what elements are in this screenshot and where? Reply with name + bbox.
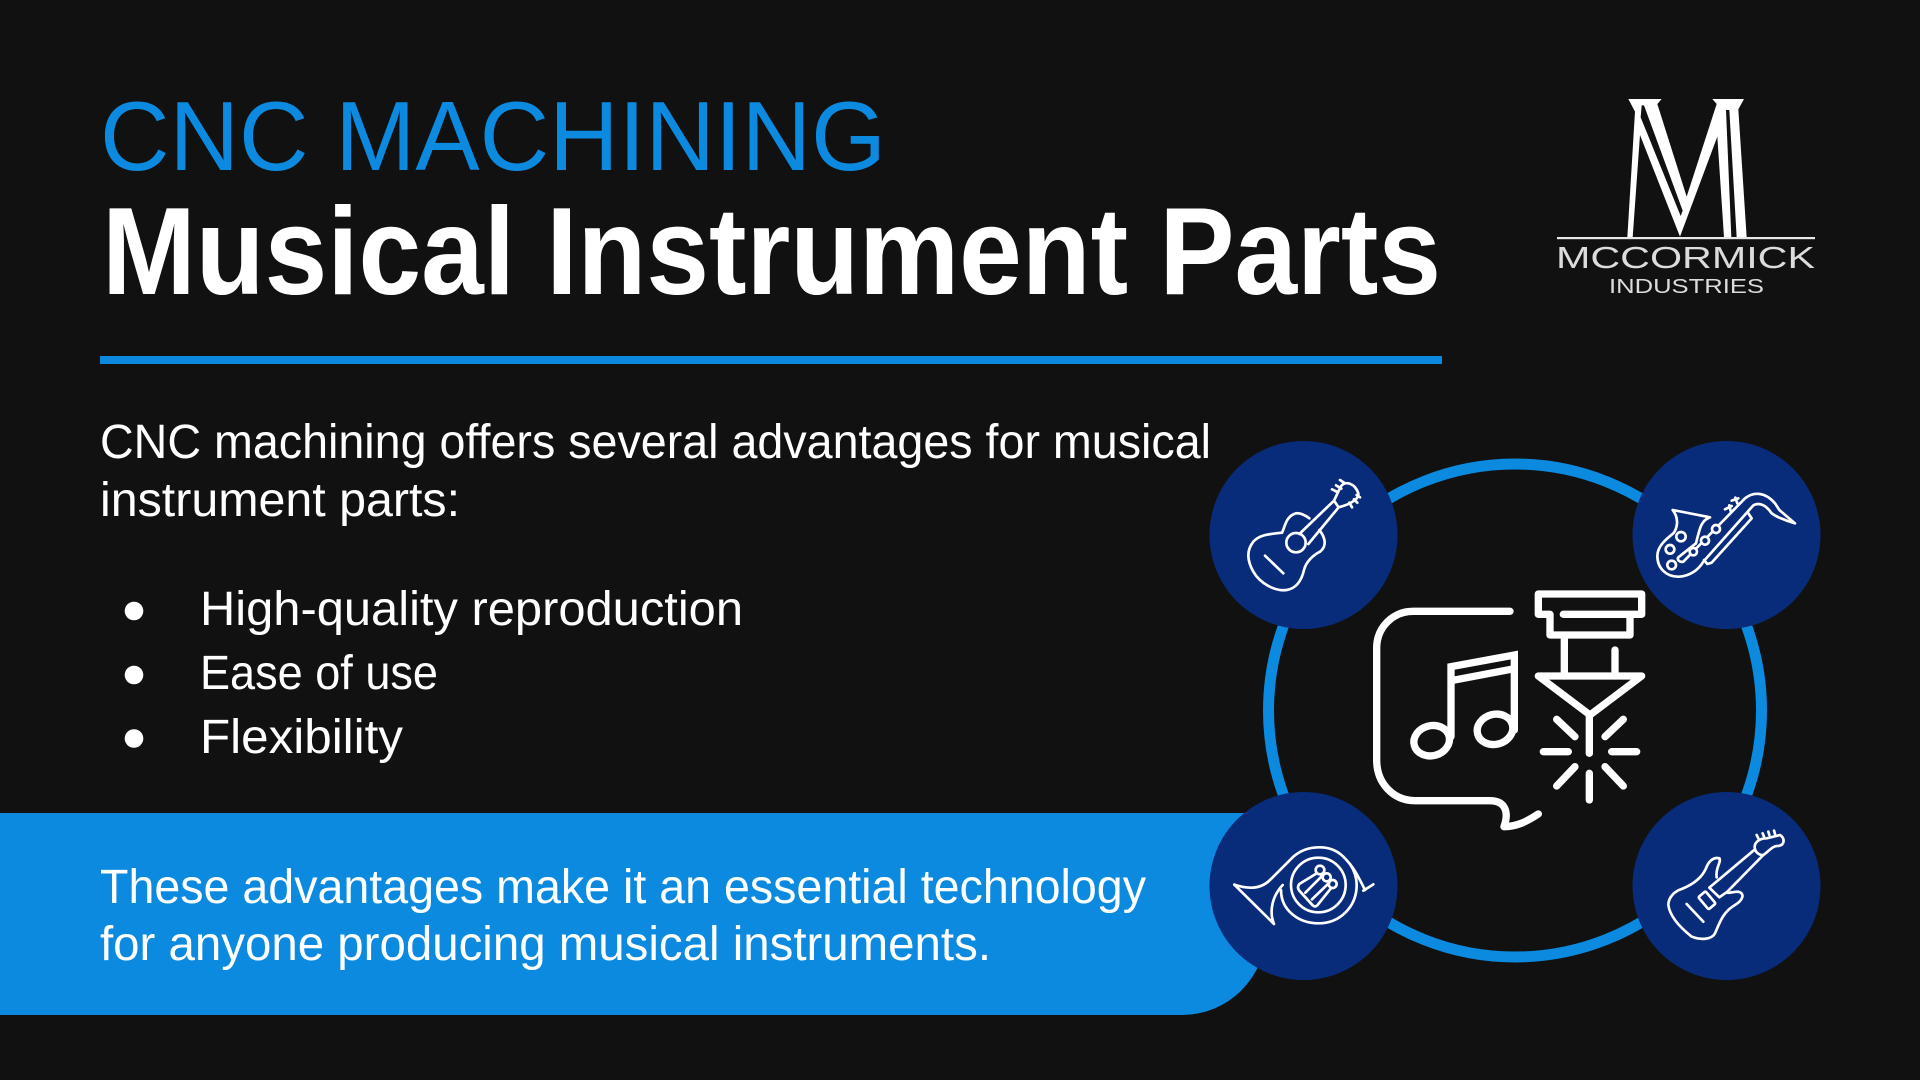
banner text — [100, 861, 1146, 971]
banner text: for anyone producing musical instruments. — [100, 918, 991, 971]
icon badge: electric guitar — [1632, 792, 1820, 980]
icon: French horn — [1234, 847, 1373, 924]
logo rule — [1557, 237, 1815, 239]
speech bubble — [1377, 611, 1538, 827]
bullet 2: Ease of use — [200, 647, 438, 700]
banner text: These advantages make it an essential technology — [100, 861, 1146, 914]
bullet 3: Flexibility — [200, 711, 403, 764]
intro paragraph: CNC machining offers several advantages for musical — [100, 416, 1211, 469]
icon: saxophone — [1657, 494, 1795, 577]
icon: acoustic guitar — [1248, 480, 1360, 590]
logo monogram M — [1627, 99, 1747, 237]
icon: electric guitar — [1668, 831, 1784, 939]
intro paragraph — [100, 416, 1211, 527]
logo: McCormick Industries — [1556, 99, 1815, 298]
diagram ring — [1268, 464, 1762, 957]
title line: Musical Instrument Parts: Musical Instrument Parts — [102, 183, 1441, 321]
logo wordmark: MCCORMICK — [1556, 240, 1815, 275]
bullet 1: High-quality reproduction — [200, 583, 743, 636]
logo sub-wordmark: INDUSTRIES — [1609, 276, 1764, 298]
bullet list — [125, 583, 743, 764]
icon badge: saxophone — [1632, 441, 1820, 629]
conclusion banner — [0, 813, 1266, 1015]
title — [100, 81, 1441, 321]
banner background — [0, 813, 1266, 1015]
intro paragraph: instrument parts: — [100, 474, 460, 527]
icon badge: acoustic guitar — [1210, 441, 1398, 629]
CNC nozzle — [1538, 594, 1642, 753]
sparks — [1543, 719, 1637, 800]
heading rule — [100, 356, 1442, 364]
title line: CNC Machining: CNC MACHINING — [100, 81, 886, 191]
central icon: music and CNC nozzle — [1377, 594, 1642, 827]
music notes — [1410, 655, 1516, 760]
icon badge: French horn — [1210, 792, 1398, 980]
